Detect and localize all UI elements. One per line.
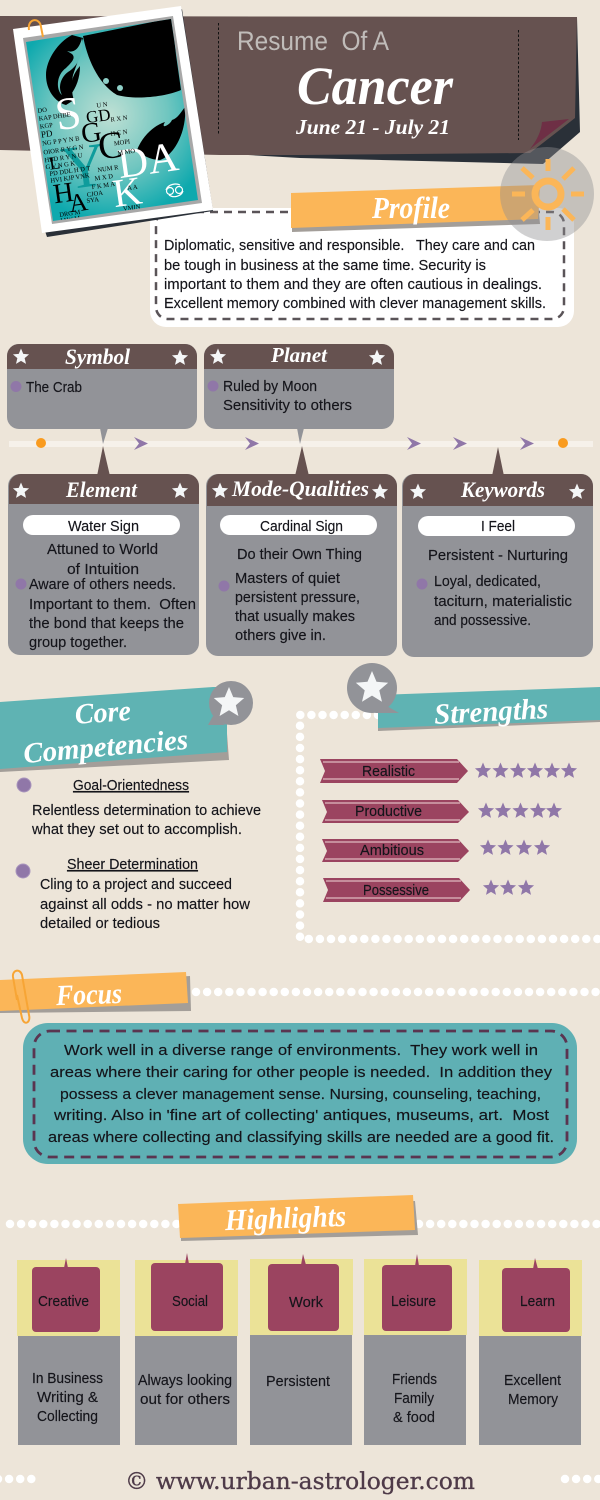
photo card: crab artwork: OIOR R Y G N (43, 144, 84, 156)
panel: focus: areas where their caring for other people is needed. In addition they (50, 1064, 553, 1081)
photo card: crab artwork (13, 6, 213, 237)
panel: keywords: taciturn, materialistic (434, 593, 572, 610)
photo card: crab artwork: PD DDL H D T (49, 165, 91, 178)
strengths: ambitious bar: Ambitious (360, 842, 424, 859)
highlight card: creative: Creative (38, 1293, 89, 1310)
photo card: crab artwork: NG P P Y N B (42, 135, 81, 148)
strengths: realistic bar: Realistic (362, 763, 415, 780)
photo card: crab artwork: HVI KJP VNK (50, 172, 90, 185)
highlight card: work: Work (289, 1294, 323, 1311)
highlight card: leisure: Friends (392, 1371, 437, 1388)
panel: mode-qualities: Cardinal Sign (260, 518, 343, 535)
core competencies list: what they set out to accomplish. (31, 821, 242, 838)
profile text box (150, 208, 574, 327)
panel: keywords: I Feel (481, 518, 515, 535)
timeline (9, 437, 593, 450)
photo card: crab artwork: G V N G K (45, 160, 76, 171)
panel: mode-qualities: others give in. (235, 627, 326, 644)
panel: element: Aware of others needs. (29, 576, 176, 593)
core competencies list: Goal-Orientedness (73, 777, 189, 794)
highlight card: social: out for others (140, 1391, 230, 1408)
photo card: crab artwork: HBD R Y N U (44, 152, 83, 164)
panel: keywords: and possessive. (434, 612, 531, 629)
highlight card: learn: Learn (520, 1293, 555, 1310)
photo card: crab artwork: M X D (94, 173, 114, 183)
profile text box: important to them and they are often cautious in dealings. (164, 276, 542, 293)
highlight card: leisure: Leisure (391, 1293, 436, 1310)
highlight card: work: Persistent (266, 1373, 331, 1390)
panel: keywords (402, 447, 593, 657)
core competencies ribbon: Competencies (22, 724, 189, 770)
panel: element: of Intuition (67, 561, 139, 578)
dates: June 21 - July 21 (295, 115, 450, 139)
photo card: crab artwork: M MO (117, 148, 136, 157)
photo card: crab artwork: KGP (39, 122, 54, 131)
photo card: crab artwork: R X N (110, 114, 128, 124)
panel: symbol (7, 344, 197, 444)
panel: keywords: Loyal, dedicated, (434, 573, 541, 590)
photo card: crab artwork: F K M A (91, 181, 116, 191)
profile text box: be tough in business at the same time. Security is (164, 257, 486, 274)
core competencies list: Sheer Determination (67, 856, 198, 873)
profile ribbon (291, 185, 540, 232)
strengths: productive bar (322, 800, 562, 823)
photo card: crab artwork: DO (37, 107, 48, 115)
panel: element: group together. (29, 634, 127, 651)
photo card: crab artwork: NUM R (97, 164, 120, 174)
highlight card: leisure (364, 1254, 467, 1445)
core competencies list: Cling to a project and succeed (40, 876, 232, 893)
header banner (0, 16, 580, 164)
photo card: crab artwork: H C N (110, 129, 128, 138)
icon: star bubble (347, 663, 399, 713)
panel: element: Attuned to World (47, 541, 158, 558)
panel: focus: possess a clever management sense. Nursing, counseling, teaching, (60, 1086, 541, 1103)
photo card: crab artwork: MOPI (114, 138, 131, 148)
photo card: crab artwork: DA (115, 134, 182, 188)
highlight card: creative: Collecting (37, 1408, 98, 1425)
strengths ribbon: Strengths (433, 693, 549, 731)
photo card: crab artwork: Y (57, 130, 111, 204)
panel: focus: areas where collecting and classifying skills are needed are a good fit. (48, 1129, 554, 1146)
strengths: ambitious bar (322, 839, 550, 862)
core competencies list (16, 777, 261, 932)
footer url: © www.urban-astrologer.com (125, 1469, 475, 1495)
highlight card: social (135, 1253, 238, 1445)
photo card: crab artwork: VMIN (123, 204, 141, 213)
panel: mode-qualities (206, 446, 397, 656)
main title (295, 56, 454, 139)
highlight card: creative (17, 1258, 120, 1445)
photo card: crab artwork: H (51, 177, 76, 210)
strengths: realistic bar (320, 759, 577, 783)
core competencies list: Relentless determination to achieve (32, 802, 261, 819)
strengths ribbon (347, 663, 600, 731)
photo card: crab artwork: S (52, 86, 84, 140)
highlight card: learn: Memory (508, 1391, 558, 1408)
highlight card: learn: Excellent (504, 1372, 562, 1389)
strengths: productive bar: Productive (355, 803, 422, 820)
panel: element: Important to them. Often (29, 596, 196, 613)
core competencies ribbon: Core (74, 695, 132, 731)
photo card: crab artwork: GD (85, 105, 112, 127)
panel: mode-qualities: Masters of quiet (235, 570, 341, 587)
photo card: crab artwork: JAW M (60, 215, 81, 225)
panel: keywords: Persistent - Nurturing (428, 547, 568, 564)
highlight card: social: Always looking (138, 1372, 232, 1389)
photo card: crab artwork: CJOA (86, 190, 104, 199)
panel: symbol: Symbol (65, 344, 131, 369)
highlight card: creative: In Business (32, 1370, 103, 1387)
panel: element: Water Sign (68, 518, 139, 535)
panel: planet: Ruled by Moon (223, 378, 317, 395)
photo card: crab artwork: KAP DHBE (38, 111, 71, 123)
panel: mode-qualities: Mode-Qualities (231, 476, 369, 501)
panel: mode-qualities: Do their Own Thing (237, 546, 362, 563)
panel: element: Element (65, 477, 138, 502)
panel: focus (23, 1023, 577, 1164)
panel: focus: Work well in a diverse range of environments. They work well in (64, 1042, 538, 1059)
icon: star bubble (208, 681, 253, 725)
focus ribbon (0, 971, 191, 1023)
profile ribbon: Profile (371, 190, 450, 225)
photo card: crab artwork: SYA (86, 196, 100, 205)
photo card: crab artwork: PD (40, 128, 54, 140)
highlight card: leisure: Family (394, 1390, 434, 1407)
highlight card: work (250, 1254, 353, 1445)
highlight card: learn (479, 1258, 582, 1445)
core competencies list: against all odds - no matter how (40, 896, 250, 913)
focus ribbon: Focus (55, 978, 123, 1012)
panel: planet: Planet (270, 343, 328, 367)
strengths: possessive bar (323, 878, 534, 902)
highlight card: social: Social (172, 1293, 208, 1310)
strengths: possessive bar: Possessive (363, 882, 429, 899)
photo card: crab artwork: DRG M (59, 209, 81, 219)
panel: planet: Sensitivity to others (223, 397, 352, 414)
panel: planet (204, 343, 394, 444)
main title: Cancer (297, 56, 454, 116)
panel: element: the bond that keeps the (29, 615, 184, 632)
panel: symbol: The Crab (26, 379, 82, 396)
photo card: crab artwork: C (95, 123, 126, 169)
highlight card: leisure: & food (393, 1409, 435, 1426)
core competencies ribbon (0, 681, 253, 772)
photo card: crab artwork: A A (127, 184, 138, 192)
photo card: crab artwork: K (110, 167, 145, 216)
icon: paperclip top (29, 20, 43, 37)
photo card: crab artwork: U N (96, 101, 108, 110)
highlights ribbon: Highlights (224, 1200, 347, 1237)
panel: element (8, 446, 199, 655)
highlight card: creative: Writing & (37, 1389, 98, 1406)
panel: mode-qualities: persistent pressure, (235, 589, 360, 606)
photo card: crab artwork: A (67, 187, 90, 218)
panel: keywords: Keywords (460, 477, 545, 502)
icon: paperclip (13, 971, 29, 1023)
header small title: Resume Of A (237, 26, 389, 56)
photo card: crab artwork: L (48, 152, 61, 174)
panel: focus: writing. Also in 'fine art of collecting' antiques, museums, art. Most (53, 1107, 550, 1124)
panel: mode-qualities: that usually makes (235, 608, 355, 625)
icon: sun (500, 147, 594, 241)
photo card: crab artwork: G (79, 116, 104, 150)
profile text box: Excellent memory combined with clever management skills. (164, 295, 546, 312)
core competencies list: detailed or tedious (40, 915, 160, 932)
highlights ribbon (178, 1195, 418, 1241)
profile text box: Diplomatic, sensitive and responsible. They care and can (164, 237, 535, 254)
